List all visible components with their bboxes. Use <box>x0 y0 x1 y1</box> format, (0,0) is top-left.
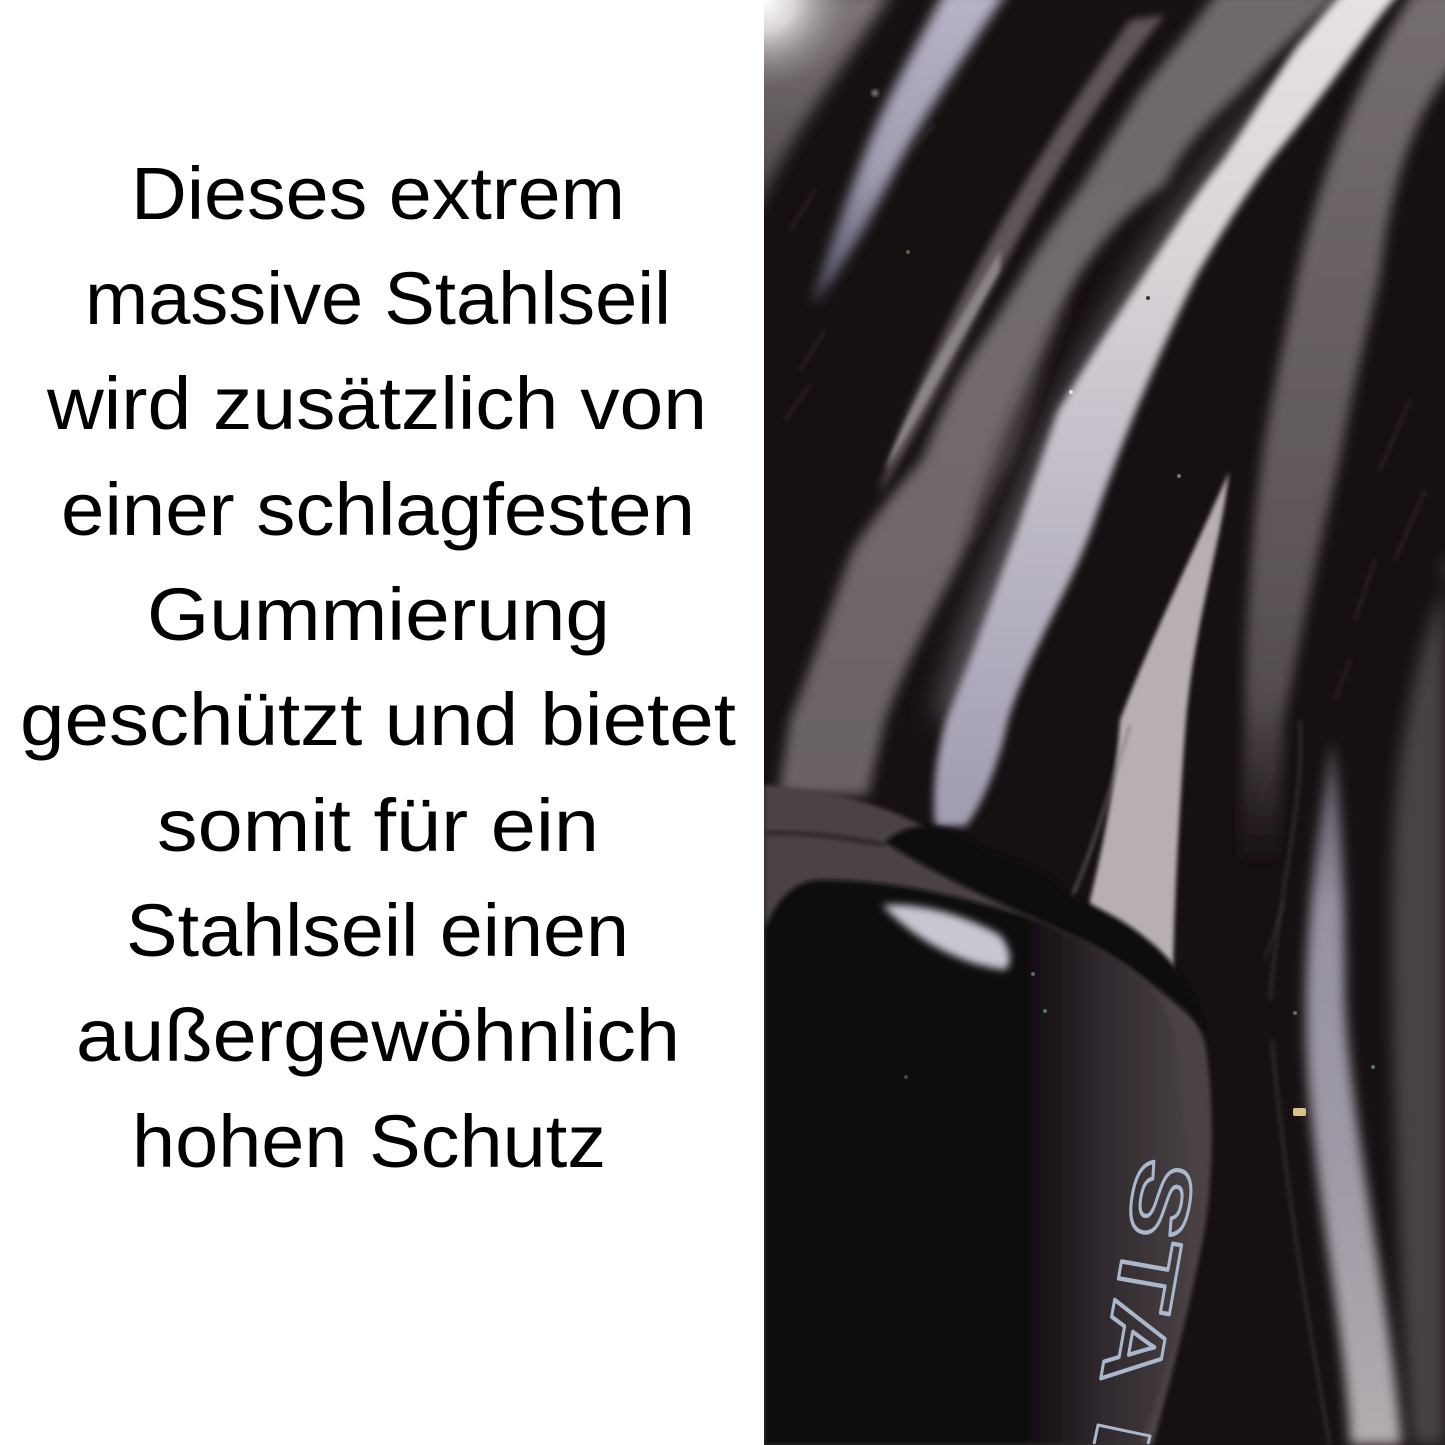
lock body: outer rim <box>764 785 1212 1445</box>
photo: close-up of rubber-coated steel cable and lock body <box>750 0 1445 1445</box>
text block: product description: Gummierung <box>147 573 610 656</box>
text block: product description: massive Stahlseil <box>85 257 671 340</box>
cable: broad grey band <box>778 0 1345 795</box>
text block: product description: somit für ein <box>157 784 599 867</box>
text block: product description: Dieses extrem <box>131 152 625 235</box>
cable: brown fibre texture <box>785 125 1425 960</box>
lock body: embossed brand lettering: STA <box>1083 1153 1213 1394</box>
cable: thin edge lines <box>1070 720 1330 1445</box>
cable: right grey band <box>1240 0 1445 860</box>
lock body: partial fourth letter at the bottom edge <box>1094 1425 1150 1444</box>
cable: upper-left grey reflection <box>764 0 896 211</box>
text block: product description: hohen Schutz <box>132 1100 606 1183</box>
cable: main bright highlight <box>934 0 1402 826</box>
text block: product description <box>20 152 736 1183</box>
cable: thin grey reflection <box>878 15 1165 495</box>
text block: product description: außergewöhnlich <box>76 994 680 1077</box>
lock body: dark crease and collar <box>885 826 1205 1030</box>
text block: product description: wird zusätzlich von <box>46 362 707 445</box>
text block: product description: einer schlagfesten <box>61 468 695 551</box>
text block: product description: Stahlseil einen <box>126 889 629 972</box>
cable: lower-right lavender highlight <box>1306 740 1402 1445</box>
cable: dark streak inside grey band <box>964 316 1058 542</box>
background: bright gap between cables <box>1088 472 1229 980</box>
cable: lavender reflection <box>812 0 1008 305</box>
photo speckles <box>872 90 1375 1116</box>
text block: product description: geschützt und bietet <box>20 678 736 761</box>
cable: soft halo left of main highlight <box>935 90 1290 720</box>
lock body: specular highlight <box>882 905 1010 970</box>
lock body: dark main surface <box>764 880 1197 1445</box>
cable: white corner glare <box>764 0 842 80</box>
cable: far-right grey band <box>1391 560 1445 1445</box>
